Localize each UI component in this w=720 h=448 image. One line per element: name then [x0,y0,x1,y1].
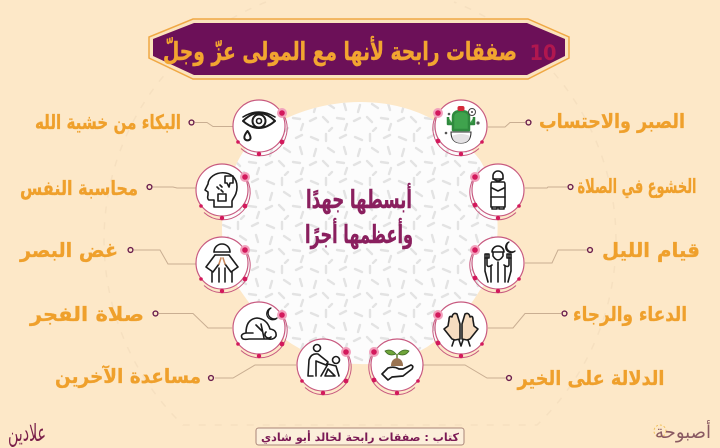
item: night prayer: قيام الليل [602,238,700,262]
item: crying from fear of God: البكاء من خشية الله [35,110,181,134]
item: lowering the gaze: غض البصر [19,238,118,262]
item: self-accountability: محاسبة النفس [20,176,138,200]
central message [305,183,413,250]
item: supplication and hope [433,302,687,358]
icon: cactus in a pot [445,106,480,143]
central message: أبسطها جهدًا [306,183,412,215]
item: self-accountability [20,164,250,220]
item: guiding to good [369,339,664,395]
item: Fajr prayer [29,302,287,358]
number 10: 10 [530,41,556,65]
icon: prostrating worshipper and crescent [242,308,277,339]
icon: raised praying hands [444,313,478,346]
item: patience [433,100,685,156]
icon: man covering eyes [206,244,238,282]
icon: hand holding a seedling [382,350,413,380]
item: night prayer [470,237,700,293]
logo: left: علادين [8,419,46,447]
item: helping others [55,339,351,395]
icon: person helping a fallen person [308,344,340,376]
item: helping others: مساعدة الآخرين [55,364,201,388]
item: patience: الصبر والاحتساب [539,109,685,133]
icon: weeping eye [243,112,275,140]
title banner [149,19,569,79]
item: crying from fear of God [35,100,287,156]
item: guiding to good: الدلالة على الخير [517,366,664,390]
item: lowering the gaze [19,237,250,293]
title text: صفقات رابحة لأنها مع المولى عزّ وجلّ [163,36,517,67]
logo: right: أصبوحة [655,420,711,443]
icon: standing worshipper [491,171,505,209]
source box: كتاب : صفقات رابحة لخالد أبو شادي [261,430,460,444]
icon: worshipper raising hands with crescent [485,242,515,282]
central message: وأعظمها أجرًا [305,218,413,250]
item: supplication and hope: الدعاء والرجاء [573,302,687,326]
item: humility in prayer [470,164,696,220]
item: Fajr prayer: صلاة الفجر [29,302,144,326]
icon: head with thumbs [205,173,237,207]
central patterned blob [222,102,498,364]
